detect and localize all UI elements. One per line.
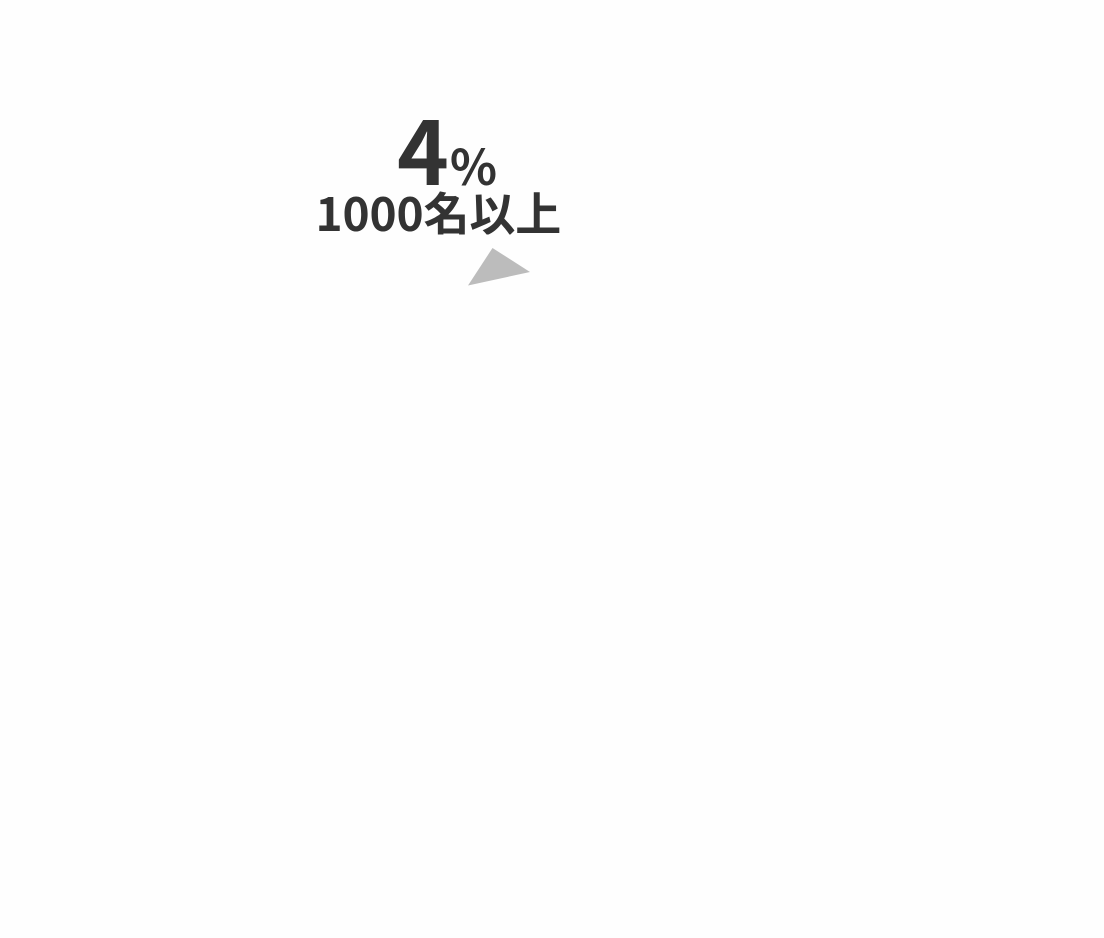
percentage value: 4%: [397, 84, 497, 211]
pointer triangle: [468, 248, 530, 286]
callout: 4% 1000名以上: [319, 84, 560, 286]
